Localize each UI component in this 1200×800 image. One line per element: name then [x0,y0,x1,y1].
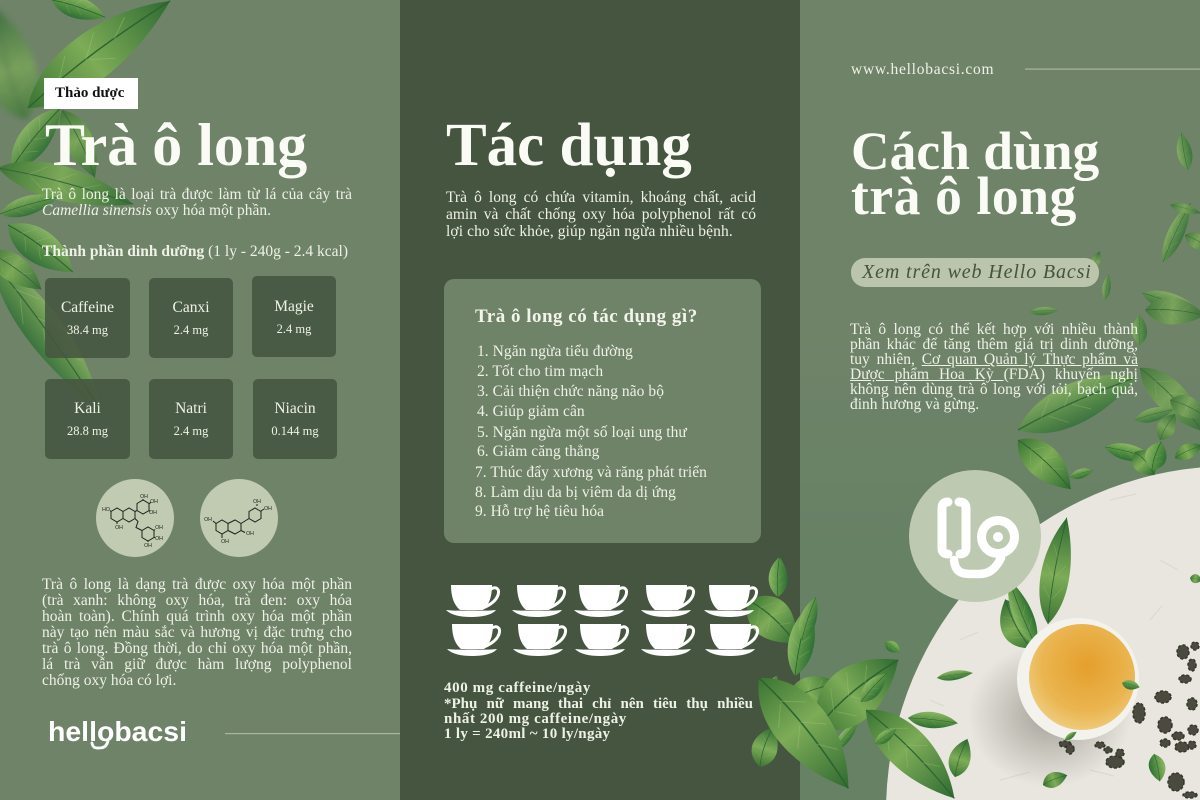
body text right: Dược phẩm Hoa Kỳ (FDA) khuyến nghị [850,366,1138,383]
card: Caffeine: Caffeine [61,299,114,316]
title: Cách dùng trà ô long: Cách dùng [851,121,1099,181]
title: Cách dùng trà ô long [851,121,1099,226]
molecule circle right: OH [204,517,212,523]
body text left: hoàn toàn). Chính quá trình oxy hóa một phần [42,608,352,625]
molecule circle right: OH [253,499,261,505]
molecule circle left: OH [155,536,163,542]
dry oolong tea leaves [1059,642,1199,798]
card: Niacin [253,379,337,459]
item 9: 9. Hỗ trợ hệ tiêu hóa [475,503,604,520]
tea leaves behind the cup [989,515,1079,657]
body text left: (trà xanh: không oxy hóa, trà đen: oxy hóa [42,592,352,609]
line beside website [1025,68,1200,70]
intro left [42,186,352,219]
intro middle: amin và chất chống oxy hóa polyphenol rất có [446,206,756,223]
nutrition cards [45,276,337,459]
card: Natri: 2.4 mg [174,424,208,438]
item 6: 6. Giảm căng thẳng [477,443,599,460]
molecule circle left [96,479,174,557]
item 2: 2. Tốt cho tim mạch [477,363,603,380]
molecule circle right [200,479,278,557]
body text left: trà ô long. Đồng thời, do chỉ oxy hóa một phần, [42,640,352,657]
Hello Bacsi wordmark: hellobacsi [48,716,187,747]
item 8: 8. Làm dịu da bị viêm da dị ứng [475,484,676,501]
body text right: đinh hương và gừng. [850,396,979,413]
line beside logo [225,733,400,734]
cups row 2 [447,624,758,656]
benefits list [475,343,707,520]
molecule circle left: OH [144,543,152,549]
benefits panel heading: Trà ô long có tác dụng gì? [475,306,698,327]
tea leaves: top left [0,0,170,379]
intro middle [446,189,756,240]
cup shadow [968,643,1132,787]
tea leaves: lower left of right panel [1008,427,1200,500]
body text right: Trà ô long có thể kết hợp với nhiều thành [850,321,1138,338]
card: Niacin: 0.144 mg [271,424,319,438]
caffeine note [444,680,753,742]
title: Tác dụng: Tác dụng [446,112,692,179]
caffeine note: *Phụ nữ mang thai chỉ nên tiêu thụ nhiều [444,696,753,712]
molecule circle left: OH [155,525,163,531]
molecule circle right: OH [264,506,272,512]
intro left: Camellia sinensis oxy hóa một phần. [42,202,271,219]
intro middle: lợi cho sức khỏe, giúp ngăn ngừa nhiều bệnh. [446,223,733,240]
benefits panel background [444,279,761,543]
card: Magie [252,276,336,357]
card: Niacin: Niacin [274,400,316,417]
card: Magie: 2.4 mg [277,322,311,336]
body text right: tuy nhiên, Cơ quan Quản lý Thực phẩm và [850,351,1138,368]
card: Caffeine [45,278,130,358]
molecule circle left: OH [115,525,123,531]
tea leaves: centre-right cluster [736,557,976,800]
tea leaves on plate [936,573,1200,791]
card: Canxi [149,278,233,358]
body text right [850,321,1138,413]
caffeine note: 1 ly = 240ml ~ 10 ly/ngày [444,726,610,742]
tea leaves: right edge [1009,131,1200,448]
body text left: chống oxy hóa có lợi. [42,672,176,689]
caffeine note: 400 mg caffeine/ngày [444,680,591,696]
tag: Thảo dược [44,78,138,109]
center panel background [400,0,800,800]
web pill: Xem trên web Hello Bacsi [862,261,1092,283]
card: Natri [149,379,233,459]
body text right: phần khác để tăng thêm giá trị dinh dưỡng, [850,336,1138,353]
molecule circle left: OH [140,494,148,500]
card: Canxi: 2.4 mg [174,323,208,337]
item 7: 7. Thúc đẩy xương và răng phát triển [475,464,707,481]
intro left: Trà ô long là loại trà được làm từ lá của cây trà [42,186,352,203]
item 5: 5. Ngăn ngừa một số loại ung thư [477,424,687,441]
body text left: này tạo nên màu sắc và hương vị đặc trưng cho [42,624,352,641]
card: Kali: 28.8 mg [67,424,108,438]
website: www.hellobacsi.com [851,61,994,78]
item 3: 3. Cải thiện chức năng não bộ [477,383,664,400]
molecule circle right: OH [221,539,229,545]
intro middle: Trà ô long có chứa vitamin, khoáng chất, acid [446,189,756,206]
body text left: Trà ô long là dạng trà được oxy hóa một phần [42,576,352,593]
white textured plate [886,468,1200,800]
title: Trà ô long: Trà ô long [45,112,307,178]
card: Natri: Natri [175,400,207,417]
card: Magie: Magie [274,298,314,315]
body text left: lá trà vẫn giữ được hàm lượng polyphenol [42,656,352,673]
body text left [42,576,352,689]
molecule circle left: OH [150,499,158,505]
molecule circle left: HO [102,507,110,513]
cups row 1 [446,585,757,617]
tag: Thảo dược: Thảo dược [55,85,124,101]
item 1: 1. Ngăn ngừa tiểu đường [477,343,633,360]
logo badge [909,470,1041,602]
molecule circle right: OH [246,531,254,537]
molecule circle left: OH [149,510,157,516]
item 4: 4. Giúp giảm cân [477,403,585,420]
card: Kali [45,379,130,459]
body text right: không nên dùng trà ô long với tỏi, bạch quả, [850,381,1138,398]
title: Cách dùng trà ô long: trà ô long [851,166,1077,226]
card: Canxi: Canxi [172,299,210,316]
card: Kali: Kali [74,400,101,417]
nutrition heading: Thành phần dinh dưỡng (1 ly - 240g - 2.4 kcal) [42,243,348,260]
card: Caffeine: 38.4 mg [67,323,108,337]
caffeine note: nhất 200 mg caffeine/ngày [444,710,627,726]
tea cup [1017,618,1141,740]
